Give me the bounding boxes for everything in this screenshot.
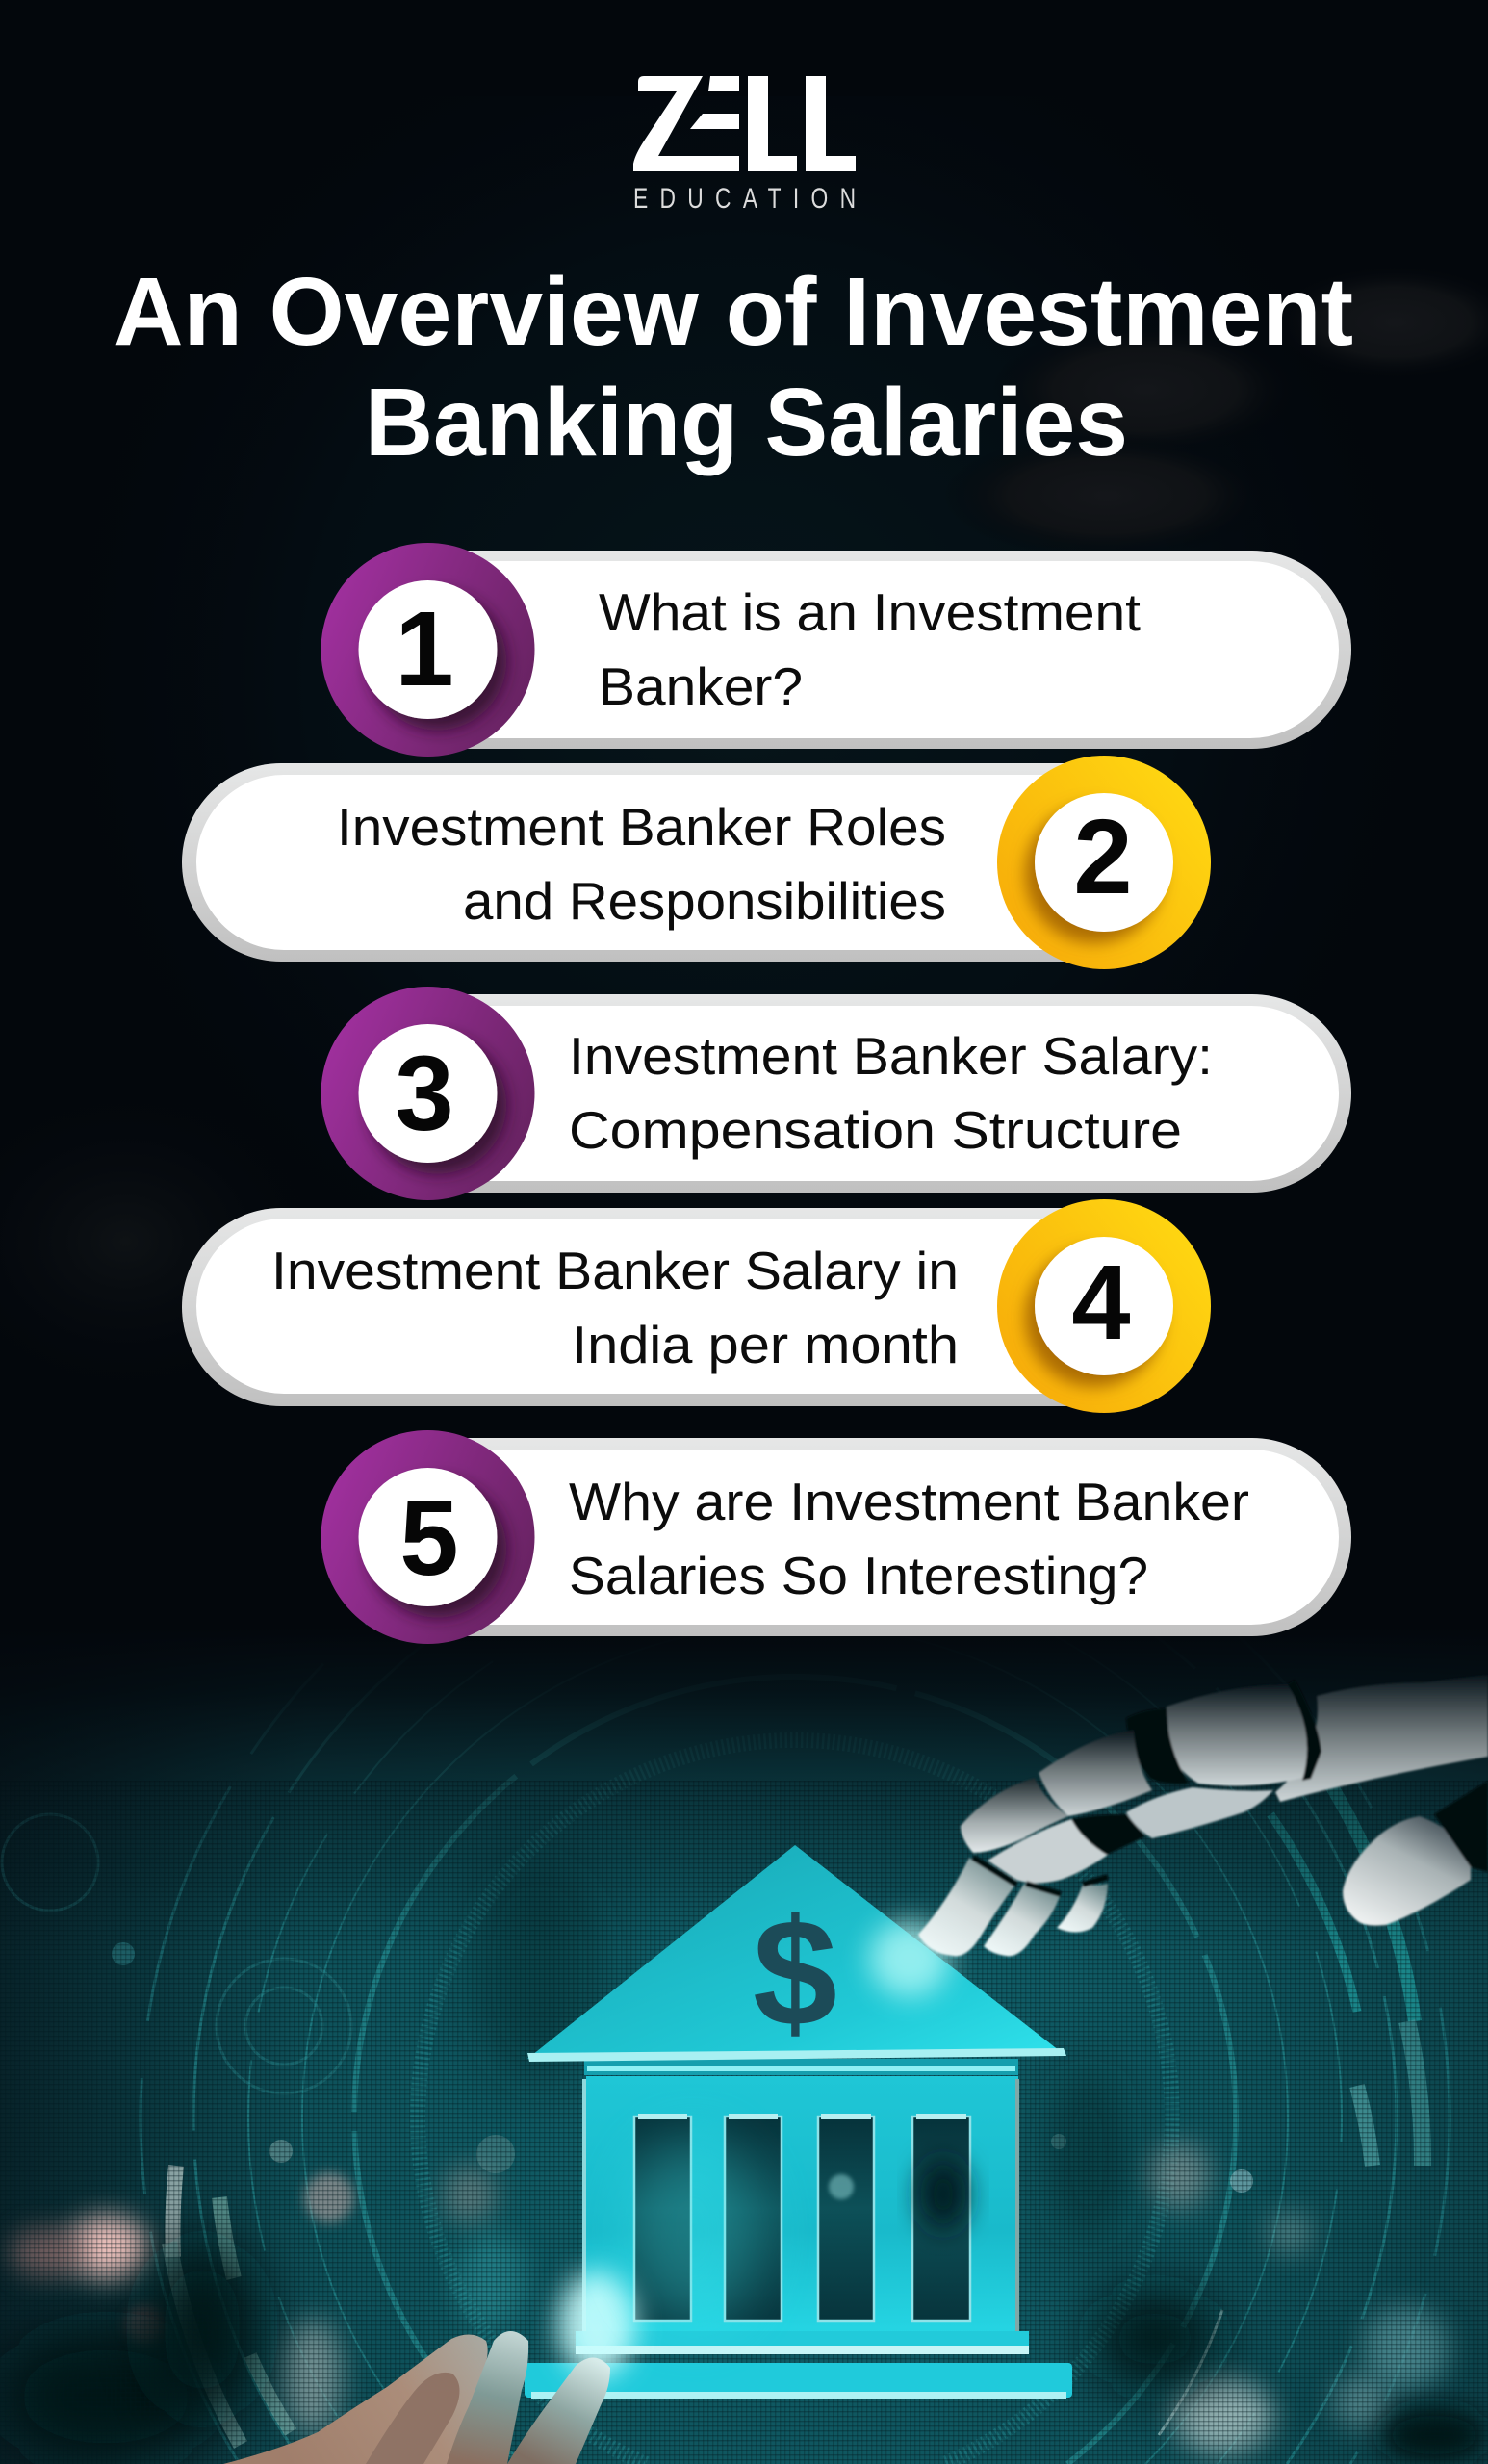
list item 2	[182, 756, 1211, 969]
robot fingers	[918, 1858, 1016, 1956]
number badge 1	[321, 543, 535, 757]
background: dark soft patches	[0, 1858, 1488, 2464]
thumb joint	[1434, 1781, 1488, 1872]
bank roof	[527, 1845, 1066, 2062]
pill 1 text: Banker?	[599, 656, 803, 716]
title: An Overview of Investment	[114, 258, 1353, 366]
forearm	[1275, 1675, 1488, 1802]
background: faint robot hand behind title	[943, 265, 1488, 558]
logo mark: ZELL	[633, 76, 856, 171]
middle finger	[447, 2331, 528, 2464]
dark joint	[1288, 1680, 1321, 1781]
window highlights	[638, 2114, 966, 2119]
dark joint	[1126, 1708, 1189, 1784]
dollar sign: $	[753, 1888, 837, 2058]
background: faint glow behind list	[0, 96, 1488, 1540]
finger joint rings	[973, 1858, 1108, 1894]
logo wordmark: EDUCATION	[633, 182, 856, 215]
list item 5	[321, 1430, 1351, 1644]
logo	[633, 76, 856, 215]
title: Banking Salaries	[365, 369, 1128, 476]
pill 2 text	[337, 797, 946, 931]
pill 2	[182, 763, 1203, 962]
pill 4 text: Investment Banker Salary in	[271, 1241, 959, 1300]
background: teal scene at the bottom	[0, 1463, 1488, 2464]
front finger	[507, 2357, 610, 2464]
list item 4	[182, 1199, 1211, 1413]
background: circular tech rings	[141, 1463, 1450, 2464]
pill 2 text: and Responsibilities	[463, 871, 946, 931]
list item 3	[321, 987, 1351, 1200]
number badge 4: 4	[1071, 1244, 1131, 1362]
background: darker left edge	[0, 1627, 308, 2464]
pill 5 text: Salaries So Interesting?	[569, 1546, 1148, 1605]
number badge 5	[321, 1430, 535, 1644]
pill 3 text	[569, 1026, 1213, 1160]
palm and back finger	[223, 2334, 488, 2464]
dark joint	[1071, 1814, 1145, 1855]
bank icon	[525, 1845, 1072, 2399]
pill 2 text: Investment Banker Roles	[337, 797, 946, 857]
number badge 3	[321, 987, 535, 1200]
bank frieze band	[584, 2059, 1018, 2075]
background: scattered bokeh lights	[2, 1814, 1448, 2452]
human hand	[223, 2331, 610, 2464]
bank base slab	[525, 2363, 1072, 2399]
pill 1 text: What is an Investment	[599, 582, 1141, 642]
pill 4 text: India per month	[572, 1315, 959, 1374]
background: pixel grid texture	[0, 1781, 1488, 2464]
number badge 5: 5	[399, 1479, 459, 1598]
short finger	[366, 2373, 460, 2464]
list item 1	[321, 543, 1351, 757]
pill 5 text: Why are Investment Banker	[569, 1472, 1249, 1531]
pill 4 text	[271, 1241, 959, 1374]
pill 3	[332, 994, 1351, 1193]
pill 1	[332, 551, 1351, 749]
number badge 2	[997, 756, 1211, 969]
number badge 1: 1	[395, 590, 454, 708]
pill 1 text	[599, 582, 1141, 716]
pill 3 text: Investment Banker Salary:	[569, 1026, 1213, 1086]
background: fade into dark top	[0, 1627, 1488, 1954]
pill 5 text	[569, 1472, 1249, 1605]
pill 3 text: Compensation Structure	[569, 1100, 1182, 1160]
pill 4	[182, 1208, 1203, 1406]
knuckle segments	[1039, 1730, 1152, 1816]
thumb	[1343, 1816, 1471, 1926]
bank windows	[634, 2117, 970, 2321]
number badge 4	[997, 1199, 1211, 1413]
pill 5	[332, 1438, 1351, 1636]
bank body with columns	[576, 2076, 1029, 2354]
background: faint human hand at left	[0, 1078, 327, 1405]
title	[114, 258, 1353, 476]
upper finger segment	[1167, 1684, 1311, 1785]
number badge 3: 3	[395, 1035, 454, 1153]
robot hand	[918, 1675, 1488, 1956]
glow at roof and foot	[558, 1920, 950, 2377]
number badge 2: 2	[1073, 798, 1133, 916]
